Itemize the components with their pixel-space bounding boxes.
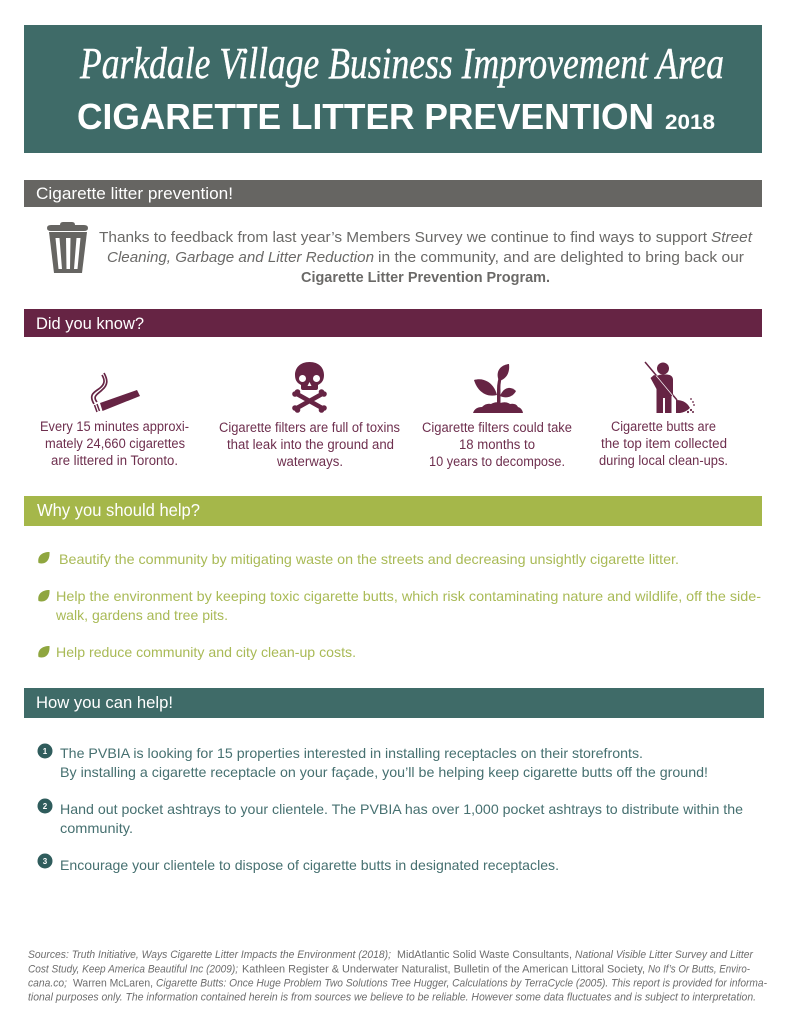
step 2: Hand out pocket ashtrays to your clientele. The PVBIA has over 1,000 pocket ashtrays to distribute within the	[60, 801, 743, 817]
title banner	[24, 25, 762, 153]
number badge 2: 2	[43, 802, 48, 811]
reason 2: Help the environment by keeping toxic cigarette butts, which risk contaminating nature and wildlife, off the side-	[56, 588, 761, 604]
fact: cigarettes littered	[40, 373, 189, 468]
fact: decomposition	[422, 364, 572, 469]
section heading: cigarette litter prevention	[24, 180, 762, 207]
intro text block	[99, 230, 753, 286]
icon: smoking cigarette	[92, 373, 140, 412]
fact text: mately 24,660 cigarettes	[45, 436, 185, 451]
intro text block: Thanks to feedback from last year’s Members Survey we continue to find ways to support	[99, 230, 707, 246]
fact text: Cigarette filters could take	[422, 420, 572, 435]
reason 2: walk, gardens and tree pits.	[55, 607, 228, 623]
fact: toxins	[219, 362, 400, 469]
section heading: why you should help	[24, 496, 762, 526]
icon: trash can	[47, 222, 88, 273]
intro text block: Cleaning, Garbage and Litter Reduction	[107, 250, 374, 266]
icon: sprouting plant	[473, 364, 523, 413]
section heading: cigarette litter prevention: Cigarette litter prevention!	[36, 185, 233, 203]
fact text: are littered in Toronto.	[51, 453, 178, 468]
sources footnote: Kathleen Register & Underwater Naturalist, Bulletin of the American Littoral Society,	[242, 964, 645, 976]
fact text: Cigarette filters are full of toxins	[219, 420, 400, 435]
fact text: during local clean-ups.	[599, 453, 728, 468]
number badge 3	[38, 854, 52, 868]
section heading: did you know	[24, 309, 762, 337]
reason 1: Beautify the community by mitigating waste on the streets and decreasing unsightly cigarette litter.	[59, 551, 679, 567]
fact text	[40, 419, 189, 468]
fact text: the top item collected	[601, 436, 727, 451]
sources footnote: tional purposes only. The information contained herein is from sources we believe to be reliable. However some data fluctuates and is subject to interpretation.	[28, 992, 756, 1004]
section heading: did you know: Did you know?	[36, 315, 144, 333]
intro text block: in the community, and are delighted to bring back our	[378, 250, 744, 266]
reason 3: Help reduce community and city clean-up costs.	[56, 644, 356, 660]
number badge 1: 1	[43, 747, 48, 756]
reason 2	[38, 588, 761, 623]
icon: leaf	[38, 590, 50, 601]
section heading: how you can help: How you can help!	[36, 693, 173, 712]
section heading: why you should help: Why you should help?	[37, 500, 200, 520]
sources footnote: Cost Study, Keep America Beautiful Inc (2009);	[28, 964, 238, 976]
step 2	[38, 798, 743, 836]
fact text	[422, 420, 572, 469]
step 1: The PVBIA is looking for 15 properties interested in installing receptacles on their storefronts.	[60, 745, 643, 761]
icon: leaf	[38, 552, 50, 563]
fact text: 10 years to decompose.	[429, 454, 565, 469]
sources footnote: MidAtlantic Solid Waste Consultants,	[397, 949, 572, 961]
sources footnote: Warren McLaren,	[73, 978, 153, 990]
sources footnote: Sources: Truth Initiative, Ways Cigarette Litter Impacts the Environment (2018);	[28, 949, 391, 961]
icon: skull and crossbones	[292, 362, 327, 413]
sources footnote: National Visible Litter Survey and Litter	[575, 949, 754, 961]
fact text: 18 months to	[459, 437, 535, 452]
fact text: Every 15 minutes approxi-	[40, 419, 189, 434]
step 1	[38, 744, 708, 780]
step 3: Encourage your clientele to dispose of cigarette butts in designated receptacles.	[60, 857, 559, 873]
fact text: that leak into the ground and	[227, 437, 394, 452]
fact text: waterways.	[276, 454, 343, 469]
number badge 1	[38, 744, 52, 758]
fact: clean-ups	[599, 362, 728, 468]
fact text	[219, 420, 400, 469]
intro text block: Street	[711, 230, 753, 246]
title: program name: CIGARETTE LITTER PREVENTION	[77, 96, 654, 137]
icon: leaf	[38, 646, 50, 657]
icon: person sweeping	[645, 362, 695, 413]
fact text	[599, 419, 728, 468]
step 1: By installing a cigarette receptacle on your façade, you’ll be helping keep cigarette butts off the ground!	[60, 764, 708, 780]
fact text: Cigarette butts are	[611, 419, 716, 434]
sources footnote: No If’s Or Butts, Enviro-	[648, 964, 750, 976]
number badge 3: 3	[43, 857, 48, 866]
step 2: community.	[60, 820, 133, 836]
title: year: 2018	[665, 111, 715, 134]
intro text block: Cigarette Litter Prevention Program.	[301, 270, 550, 286]
section heading: how you can help	[24, 688, 764, 718]
number badge 2	[38, 798, 52, 814]
sources footnote	[28, 949, 767, 1004]
sources footnote: cana.co;	[28, 978, 67, 990]
